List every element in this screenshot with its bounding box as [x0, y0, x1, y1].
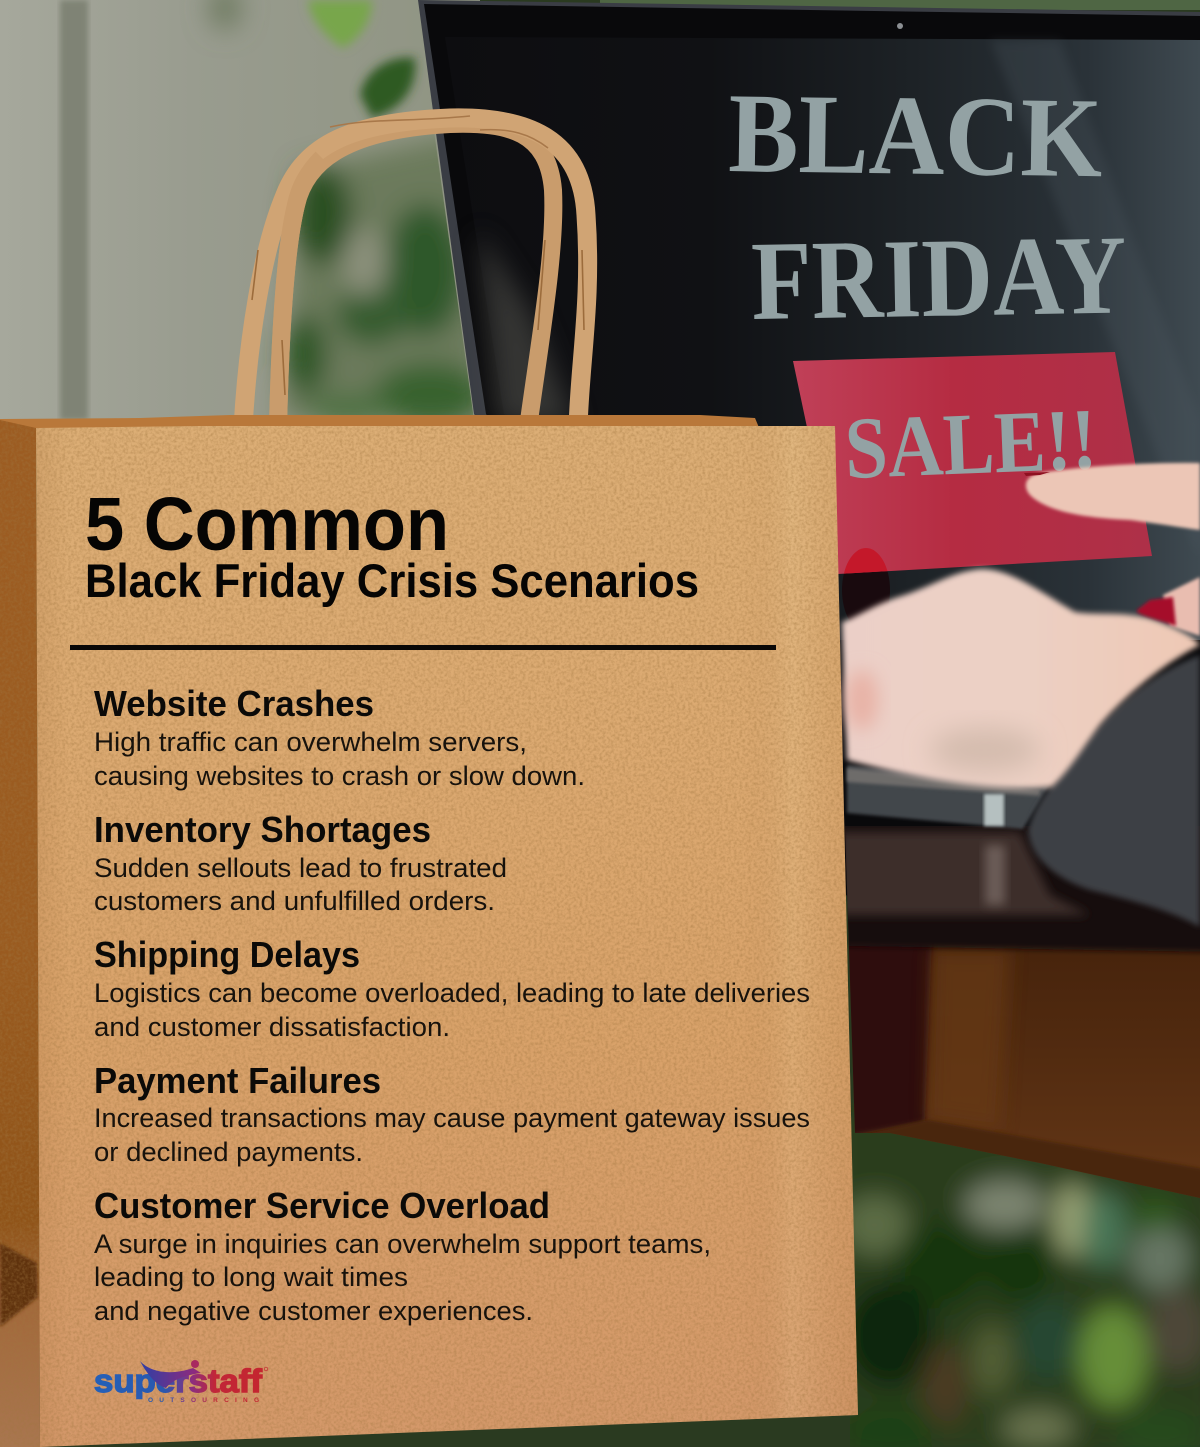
screen text: BLACK: BLACK: [728, 69, 1103, 201]
item: Payment Failures: Increased transactions may cause payment gateway issues: [94, 1103, 810, 1133]
item: Payment Failures: Payment Failures: [94, 1060, 381, 1101]
red sale banner: [793, 352, 1152, 574]
item: Shipping Delays: [94, 934, 810, 1042]
item: Inventory Shortages: customers and unfulfilled orders.: [94, 886, 495, 916]
item: Customer Service Overload: leading to long wait times: [94, 1262, 408, 1292]
bag back edge: [0, 415, 760, 440]
item: Payment Failures: [94, 1060, 810, 1167]
foliage bottom right: [850, 1162, 1200, 1447]
laptop screen: [418, 0, 1200, 900]
pointing finger: [1026, 463, 1200, 530]
item: Customer Service Overload: and negative customer experiences.: [94, 1296, 533, 1326]
second finger: [1163, 577, 1200, 636]
nail reflection red: [844, 548, 888, 574]
divider: [70, 645, 776, 650]
nail: [1137, 597, 1176, 626]
hand: [842, 569, 1200, 788]
sleeve: [1028, 655, 1200, 927]
bag side gusset: [0, 420, 40, 1447]
screen text: SALE: SALE!!: [843, 391, 1099, 498]
camera: [897, 23, 903, 29]
foliage behind bag: [209, 0, 486, 427]
logo: superstaff outsourcing: OUTSOURCING: [148, 1397, 259, 1404]
item: Payment Failures: or declined payments.: [94, 1137, 363, 1167]
item: Inventory Shortages: [94, 809, 507, 916]
front handle: [243, 118, 588, 428]
item: Inventory Shortages: Sudden sellouts lead to frustrated: [94, 853, 507, 883]
screen text: FRIDAY: FRIDAY: [750, 212, 1127, 344]
item: Customer Service Overload: A surge in inquiries can overwhelm support teams,: [94, 1229, 711, 1259]
back handle: [278, 124, 553, 428]
item: Website Crashes: causing websites to crash or slow down.: [94, 761, 585, 791]
item: Website Crashes: [94, 683, 585, 791]
item: Shipping Delays: Shipping Delays: [94, 934, 360, 975]
foliage top right strip: [600, 0, 1200, 10]
item: Inventory Shortages: Inventory Shortages: [94, 809, 431, 850]
item: Website Crashes: High traffic can overwhelm servers,: [94, 727, 527, 757]
item: Customer Service Overload: [94, 1185, 711, 1326]
item: Customer Service Overload: Customer Service Overload: [94, 1185, 550, 1226]
laptop base: [847, 765, 1050, 829]
item: Shipping Delays: Logistics can become overloaded, leading to late deliveries: [94, 978, 810, 1008]
bag front: [36, 426, 858, 1447]
title: 5 Common: [85, 482, 449, 566]
logo: superstaff outsourcing: superstaff: [94, 1363, 262, 1399]
nail reflection shadow: [842, 548, 890, 632]
hands on keyboard: [842, 463, 1200, 927]
title: [85, 482, 699, 607]
table: [830, 816, 1200, 1210]
subtitle: Black Friday Crisis Scenarios: [85, 554, 699, 607]
paper bag: [0, 415, 858, 1447]
item: Shipping Delays: and customer dissatisfaction.: [94, 1012, 450, 1042]
bag handles: [243, 116, 588, 428]
item: Website Crashes: Website Crashes: [94, 683, 374, 724]
